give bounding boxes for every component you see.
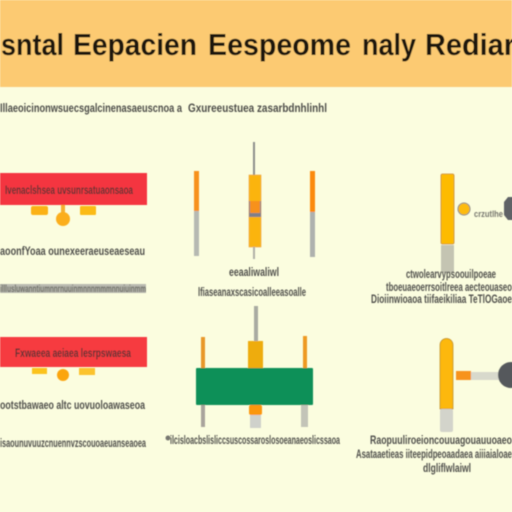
caption top right bbox=[371, 269, 512, 306]
green block bbox=[196, 368, 313, 405]
note bottom left: isaounuvuuzcnuennvzscouoaeuanseaoea bbox=[0, 438, 146, 450]
right electrode bottom bbox=[301, 336, 308, 427]
title: Eepacien bbox=[73, 27, 197, 62]
subtitle: Illaeoicinonwsuecsgalcinenasaeuscnoa a bbox=[0, 101, 182, 115]
subtitle: Gxureeustuea zasarbdnhlinhl bbox=[188, 101, 327, 115]
icon: dark hexagon bbox=[504, 197, 512, 220]
central component top bbox=[249, 142, 261, 259]
connector bottom right bbox=[456, 371, 505, 380]
note band top left: illlusluwanntiumnnrnuuinmnnnmmmnnuiuinmm bbox=[0, 284, 146, 295]
panel: top left bbox=[0, 173, 147, 295]
icon: dark circle bbox=[498, 362, 512, 388]
icon: connectors top bbox=[31, 205, 96, 226]
left electrode top bbox=[194, 171, 199, 256]
panel: bottom right bbox=[356, 338, 512, 475]
label top right: crzutlhe bbox=[474, 209, 503, 219]
caption top middle line 2: lfiaseanaxscasicoalleeasoalle bbox=[198, 287, 306, 299]
left electrode bottom bbox=[201, 337, 205, 427]
icon: yellow dot bbox=[458, 203, 470, 215]
title: sntal bbox=[1, 27, 64, 62]
red banner bottom: Fxwaeea aeiaea lesrpswaesa bbox=[15, 348, 131, 360]
panel: bottom middle bbox=[170, 306, 340, 447]
caption bottom right bbox=[356, 435, 512, 475]
red banner bottom bbox=[0, 337, 147, 367]
caption bottom right: dlgliflwlaiwl bbox=[423, 463, 471, 475]
red banner top: Ivenaclshsea uvsunrsatuaonsaoa bbox=[5, 185, 133, 197]
icon: connectors bottom bbox=[32, 368, 95, 381]
right electrode top bbox=[310, 171, 315, 257]
electrode top right bbox=[441, 174, 454, 273]
electrode bottom right bbox=[440, 338, 453, 432]
title: Eespeome bbox=[208, 27, 351, 62]
title bbox=[1, 27, 512, 62]
caption top left: aoonfYoaa ounexeeraeuseaeseau bbox=[0, 246, 145, 258]
central component bottom bbox=[248, 306, 263, 428]
panel: top right bbox=[371, 174, 512, 306]
panel: bottom left bbox=[0, 337, 170, 450]
small mark bbox=[166, 436, 170, 440]
red banner top bbox=[0, 173, 147, 205]
header band bbox=[0, 0, 512, 87]
caption top middle: eeaaliwaliwl bbox=[229, 267, 279, 279]
caption bottom left: ootstbawaeo altc uovuoloawaseoa bbox=[0, 400, 145, 412]
note band top left bbox=[0, 284, 146, 295]
caption bottom middle: ilcisloacbslisliccsuscossaroslosoeanaeoslicssaoa bbox=[170, 435, 340, 447]
panel: top middle bbox=[194, 142, 315, 299]
title: naly bbox=[362, 27, 417, 62]
